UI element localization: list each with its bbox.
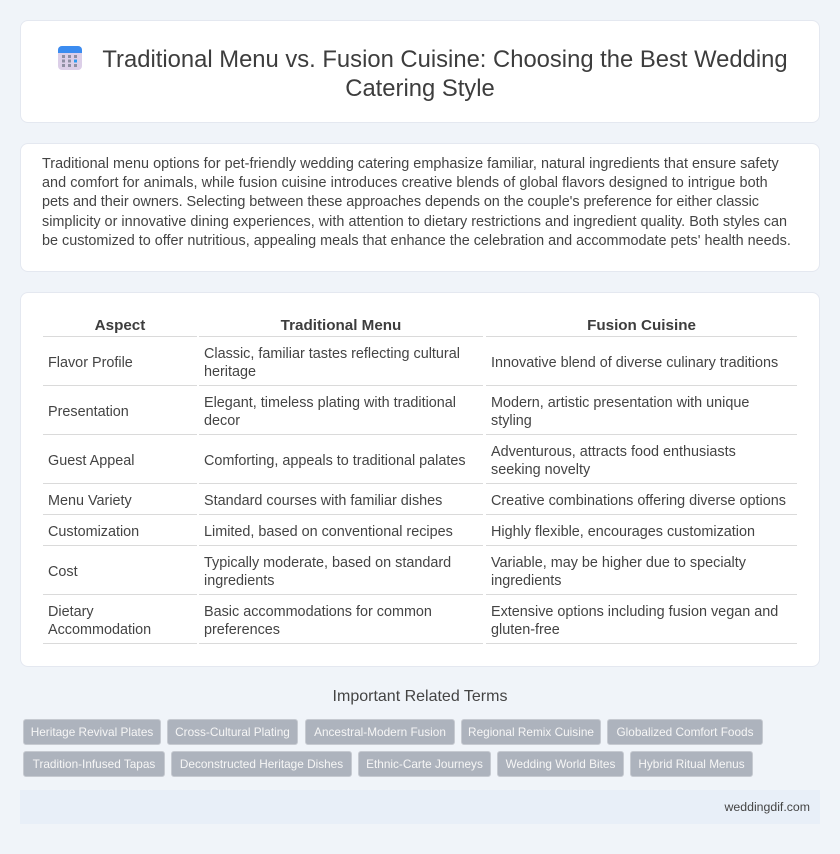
- tags: related terms: Wedding World Bites: [506, 757, 615, 771]
- row: flavor profile: Innovative blend of diverse culinary traditions: [491, 355, 778, 371]
- row: dietary accommodation: gluten-free: [491, 622, 560, 638]
- row: menu variety: Menu Variety: [48, 493, 132, 509]
- row: presentation: decor: [204, 413, 240, 429]
- intro text: pets and their owners. Selecting between these approaches depends on the couple's preference for either classic: [42, 194, 759, 210]
- table header: Traditional Menu: [281, 317, 401, 334]
- tags: related terms: Regional Remix Cuisine: [468, 725, 594, 739]
- intro text: be customized to offer nutritious, appealing meals that enhance the celebration and accommodate pets' health needs.: [42, 233, 791, 249]
- title text: [102, 46, 788, 102]
- tags: related terms: Deconstructed Heritage Dishes: [180, 757, 343, 771]
- table header: Fusion Cuisine: [587, 317, 696, 334]
- row: guest appeal: Comforting, appeals to traditional palates: [204, 453, 466, 469]
- intro text: simplicity or innovative dining experiences, with attention to dietary restrictions and ingredient quality. Both styles can: [42, 214, 787, 230]
- row: cost: ingredients: [491, 573, 561, 589]
- panel: intro: [20, 143, 820, 272]
- tags: related terms: Cross-Cultural Plating: [175, 725, 290, 739]
- tags: related terms: Tradition-Infused Tapas: [33, 757, 155, 771]
- title text: Traditional Menu vs. Fusion Cuisine: Choosing the Best Wedding: [102, 46, 788, 72]
- row: menu variety: Creative combinations offering diverse options: [491, 493, 786, 509]
- row: presentation: styling: [491, 413, 532, 429]
- intro text: and comfort for animals, while fusion cuisine introduces creative blends of global flavors designed to intrigue both: [42, 175, 768, 191]
- row: presentation: Modern, artistic presentation with unique: [491, 395, 749, 411]
- row: dietary accommodation: [48, 604, 778, 638]
- row: flavor profile: Flavor Profile: [48, 355, 133, 371]
- footer: [20, 790, 820, 824]
- table header: Aspect: [95, 317, 145, 334]
- intro text: Traditional menu options for pet-friendly wedding catering emphasize familiar, natural ingredients that ensure safety: [42, 156, 779, 172]
- panel: title: [20, 20, 820, 123]
- tags: related terms: Hybrid Ritual Menus: [638, 757, 745, 771]
- footer domain: weddingdif.com: [725, 800, 810, 814]
- heading: related terms: Important Related Terms: [333, 688, 507, 705]
- row: customization: Limited, based on conventional recipes: [204, 524, 453, 540]
- row: dietary accommodation: Accommodation: [48, 622, 151, 638]
- intro text: [42, 156, 791, 249]
- row: flavor profile: Classic, familiar tastes reflecting cultural: [204, 346, 460, 362]
- row: guest appeal: Adventurous, attracts food enthusiasts: [491, 444, 736, 460]
- row: dietary accommodation: Extensive options including fusion vegan and: [491, 604, 778, 620]
- tags: related terms: [23, 719, 763, 777]
- icon: calendar: [58, 46, 82, 70]
- row: dietary accommodation: Dietary: [48, 604, 94, 620]
- row: guest appeal: [48, 444, 736, 478]
- row: cost: [48, 555, 746, 589]
- row: flavor profile: [48, 346, 778, 380]
- tags: related terms: Heritage Revival Plates: [31, 725, 153, 739]
- row: cost: Variable, may be higher due to specialty: [491, 555, 746, 571]
- row: dietary accommodation: preferences: [204, 622, 280, 638]
- tags: related terms: Ethnic-Carte Journeys: [366, 757, 483, 771]
- tags: related terms: Globalized Comfort Foods: [616, 725, 754, 739]
- row: customization: Customization: [48, 524, 139, 540]
- row: presentation: Presentation: [48, 404, 129, 420]
- table header: [95, 317, 696, 334]
- row: cost: Typically moderate, based on standard: [204, 555, 451, 571]
- tags: related terms: Ancestral-Modern Fusion: [314, 725, 446, 739]
- row: dietary accommodation: Basic accommodations for common: [204, 604, 432, 620]
- row: flavor profile: heritage: [204, 364, 256, 380]
- row: cost: ingredients: [204, 573, 274, 589]
- row: customization: Highly flexible, encourages customization: [491, 524, 755, 540]
- row: menu variety: [48, 493, 786, 509]
- row: presentation: Elegant, timeless plating with traditional: [204, 395, 456, 411]
- row: customization: [48, 524, 755, 540]
- row: guest appeal: seeking novelty: [491, 462, 590, 478]
- row: presentation: [48, 395, 749, 429]
- title text: Catering Style: [345, 74, 495, 102]
- row: menu variety: Standard courses with familiar dishes: [204, 493, 442, 509]
- row: cost: Cost: [48, 564, 78, 580]
- row: guest appeal: Guest Appeal: [48, 453, 134, 469]
- panel: comparison table: [20, 292, 820, 667]
